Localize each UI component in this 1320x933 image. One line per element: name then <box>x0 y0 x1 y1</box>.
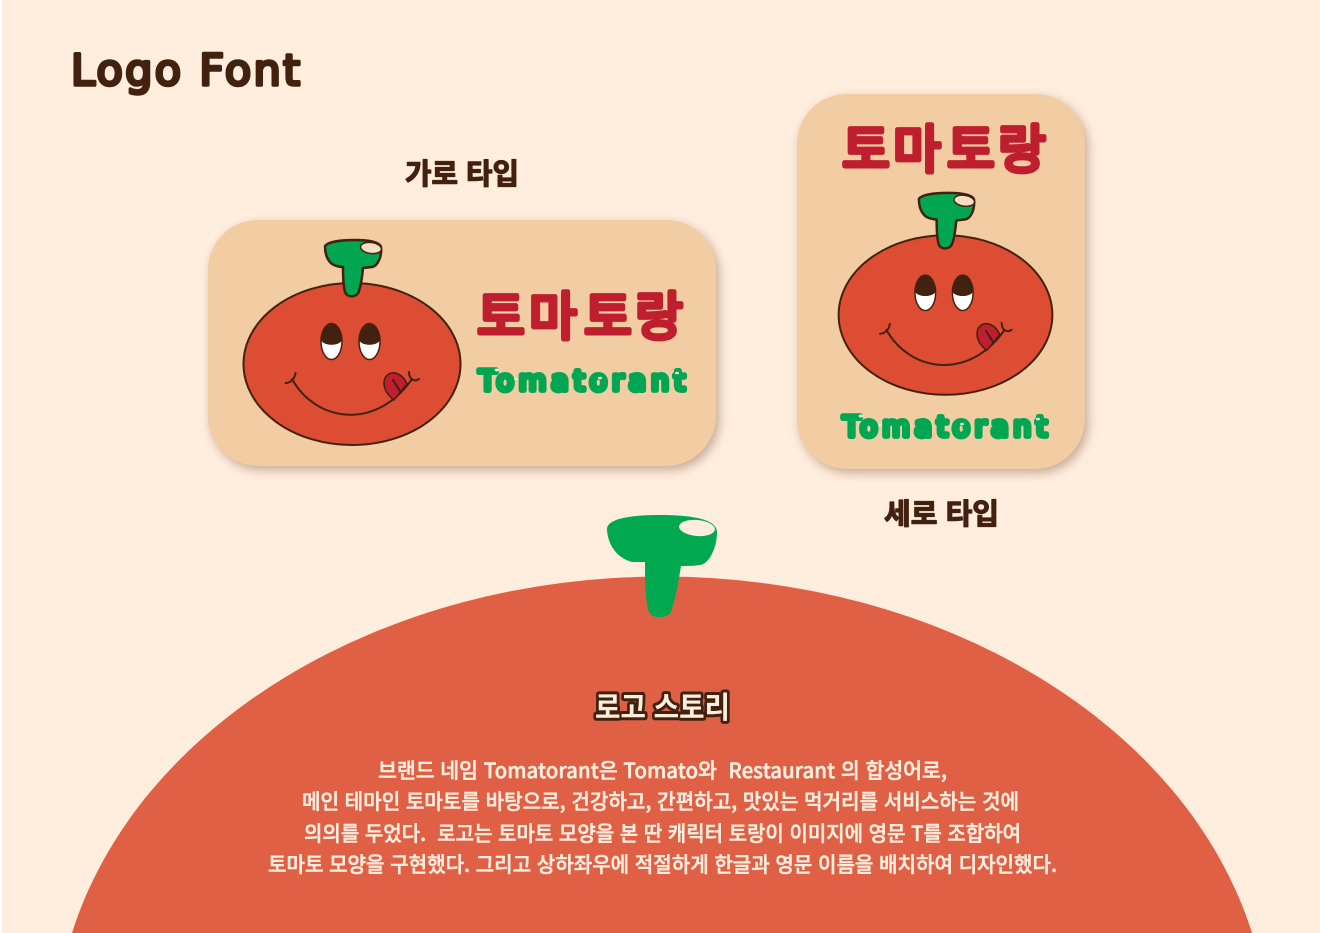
panel: horizontal logo <box>208 220 716 466</box>
heading: logo story: 로고 스토리 <box>595 683 730 727</box>
card background <box>208 220 716 466</box>
title: Logo Font <box>71 46 300 96</box>
panel: vertical logo <box>797 94 1085 469</box>
text block: logo story: 의의를 두었다. 로고는 토마토 모양을 본 딴 캐릭터 토랑이 이미지에 영문 T를 조합하여 <box>304 818 1021 848</box>
logo text: English: Tomatorant <box>478 364 685 397</box>
logo text: Korean: 토마토랑 <box>477 275 683 350</box>
icon: tomato mascot <box>244 240 460 445</box>
label: vertical type: 세로 타입 <box>884 491 999 533</box>
card background <box>797 94 1085 469</box>
text block: logo story <box>268 755 1057 879</box>
icon: tomato mascot <box>839 193 1052 395</box>
text block: logo story: 메인 테마인 토마토를 바탕으로, 건강하고, 간편하고, 맛있는 먹거리를 서비스하는 것에 <box>302 786 1019 816</box>
icon: large stem <box>607 515 717 617</box>
text block: logo story: 브랜드 네임 Tomatorant은 Tomato와 Restaurant 의 합성어로, <box>378 755 947 785</box>
logo text: English: Tomatorant <box>842 410 1047 443</box>
logo text: Korean: 토마토랑 <box>842 108 1046 183</box>
label: horizontal type: 가로 타입 <box>405 151 519 193</box>
panel: logo story dome <box>72 577 1252 933</box>
text block: logo story: 토마토 모양을 구현했다. 그리고 상하좌우에 적절하게 한글과 영문 이름을 배치하여 디자인했다. <box>268 849 1057 879</box>
